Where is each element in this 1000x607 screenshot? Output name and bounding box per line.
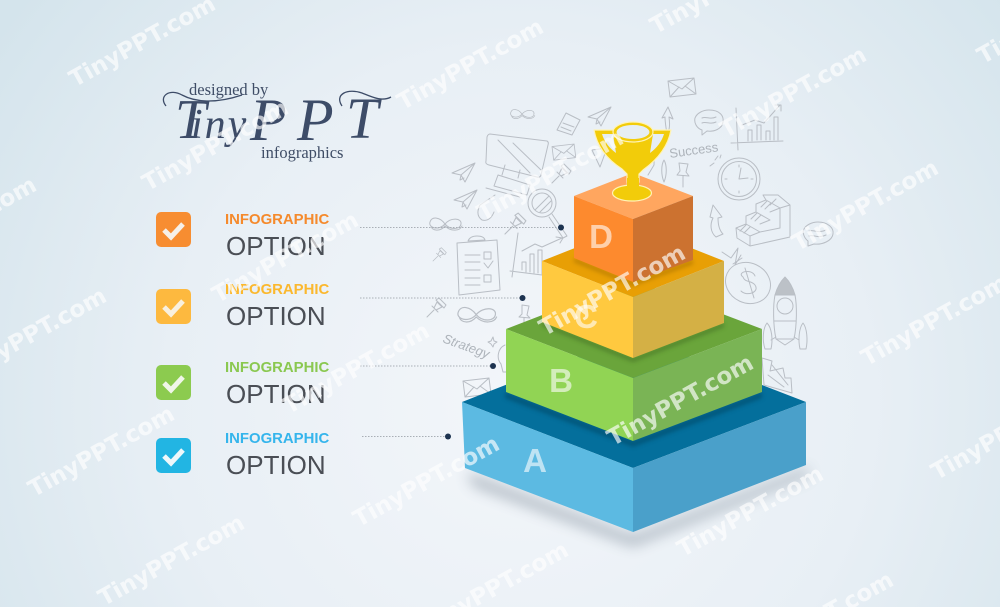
logo: designed by TinyPPT infographics: T: [346, 86, 382, 151]
checkbox orange: [156, 212, 191, 247]
icon: star: [488, 337, 497, 347]
watermarks: TinyPPT.com: [716, 42, 871, 144]
letter D: D: [589, 218, 613, 255]
option text yellow: OPTION: [226, 301, 326, 331]
option text green: OPTION: [226, 379, 326, 409]
icon: pin: [677, 163, 689, 187]
letter C: C: [574, 298, 598, 335]
watermarks: TinyPPT.com: [673, 461, 828, 563]
doodles background: [427, 78, 833, 397]
option text orange: OPTION: [226, 231, 326, 261]
pyramid: [462, 173, 808, 546]
logo: designed by TinyPPT infographics: P: [249, 87, 287, 153]
icon: infinity: [511, 110, 535, 119]
watermarks: TinyPPT.com: [788, 155, 943, 257]
layer C yellow: [542, 225, 724, 358]
checkbox yellow: [156, 289, 191, 324]
icon: speech bubble right: [803, 222, 833, 246]
icon: monitor: [478, 134, 548, 220]
icon: bar chart: [731, 105, 783, 150]
connector line B: [360, 363, 496, 369]
watermarks: TinyPPT.com: [535, 240, 690, 342]
icon: trophy: [594, 122, 671, 201]
icon: note: [557, 113, 580, 135]
label: Strategy: Strategy: [441, 331, 493, 362]
connector line C: [360, 295, 526, 301]
layer B green: [506, 280, 762, 441]
shadow on B: [542, 322, 724, 362]
icon: doodle behind trophy: [592, 125, 666, 182]
logo: designed by TinyPPT infographics: [163, 80, 391, 162]
option text green: INFOGRAPHIC: [225, 360, 329, 376]
icon: envelope top: [668, 78, 696, 97]
option text yellow: [225, 282, 329, 331]
option row 4: [156, 431, 329, 480]
icon: curved arrow up: [662, 107, 673, 134]
option text blue: OPTION: [226, 450, 326, 480]
logo: designed by TinyPPT infographics: T: [175, 89, 210, 151]
icon: money bag: [719, 248, 777, 311]
logo: designed by TinyPPT infographics: iny: [191, 102, 248, 148]
icon: curved arrow: [710, 205, 723, 237]
icon: rocket: [763, 277, 807, 349]
logo: designed by TinyPPT infographics: P: [296, 87, 334, 153]
letter A: A: [523, 442, 547, 479]
layer D orange: [574, 173, 693, 282]
logo: designed by TinyPPT infographics: designed by: [189, 80, 269, 99]
icon: bulb: [498, 345, 510, 372]
icon: rays: [710, 155, 721, 166]
watermarks: TinyPPT.com: [473, 125, 628, 227]
icon: clock: [718, 158, 760, 200]
option text green: [225, 360, 329, 409]
option text orange: INFOGRAPHIC: [225, 212, 329, 228]
watermarks: TinyPPT.com: [24, 401, 179, 503]
icon: plane: [588, 107, 611, 126]
watermarks: TinyPPT.com: [138, 95, 293, 197]
icon: envelope: [552, 144, 576, 160]
icon: pin: [552, 164, 571, 183]
watermarks: TinyPPT.com: [279, 318, 434, 420]
option text blue: INFOGRAPHIC: [225, 431, 329, 447]
icon: line chart: [510, 233, 563, 277]
label: Success: Success: [668, 139, 720, 161]
logo: designed by TinyPPT infographics: infographics: [261, 143, 343, 162]
icon: pin: [505, 213, 526, 234]
watermarks: TinyPPT.com: [208, 207, 363, 309]
icon: infinity: [458, 307, 497, 322]
option text blue: [225, 431, 329, 480]
letter B: B: [549, 362, 573, 399]
icon: speech bubble: [695, 110, 723, 135]
option row 1: [156, 212, 329, 261]
watermarks: TinyPPT.com: [393, 14, 548, 116]
connector line D: [360, 224, 564, 230]
icon: pin: [427, 298, 446, 317]
icon: infinity: [430, 218, 462, 230]
shadow on A: [505, 392, 762, 447]
option text yellow: INFOGRAPHIC: [225, 282, 329, 298]
base shadow: [466, 468, 808, 546]
icon: stairs: [736, 195, 790, 246]
icon: pin: [519, 305, 530, 325]
icon: small stairs: [762, 358, 792, 393]
checkbox green: [156, 365, 191, 400]
checkbox blue: [156, 438, 191, 473]
watermarks: TinyPPT.com: [349, 431, 504, 533]
shadow on C: [574, 258, 693, 286]
watermarks: TinyPPT.com: [603, 350, 758, 452]
connector line A: [362, 434, 451, 440]
icon: magnifier: [528, 189, 567, 238]
icon: clipboard: [457, 236, 500, 295]
layer A blue: [462, 335, 806, 532]
option text orange: [225, 212, 329, 261]
option row 3: [156, 360, 329, 409]
icon: pin: [433, 248, 446, 261]
icon: plane: [454, 190, 477, 209]
icon: envelope: [463, 378, 491, 397]
icon: plane: [452, 163, 475, 182]
option row 2: [156, 282, 329, 331]
